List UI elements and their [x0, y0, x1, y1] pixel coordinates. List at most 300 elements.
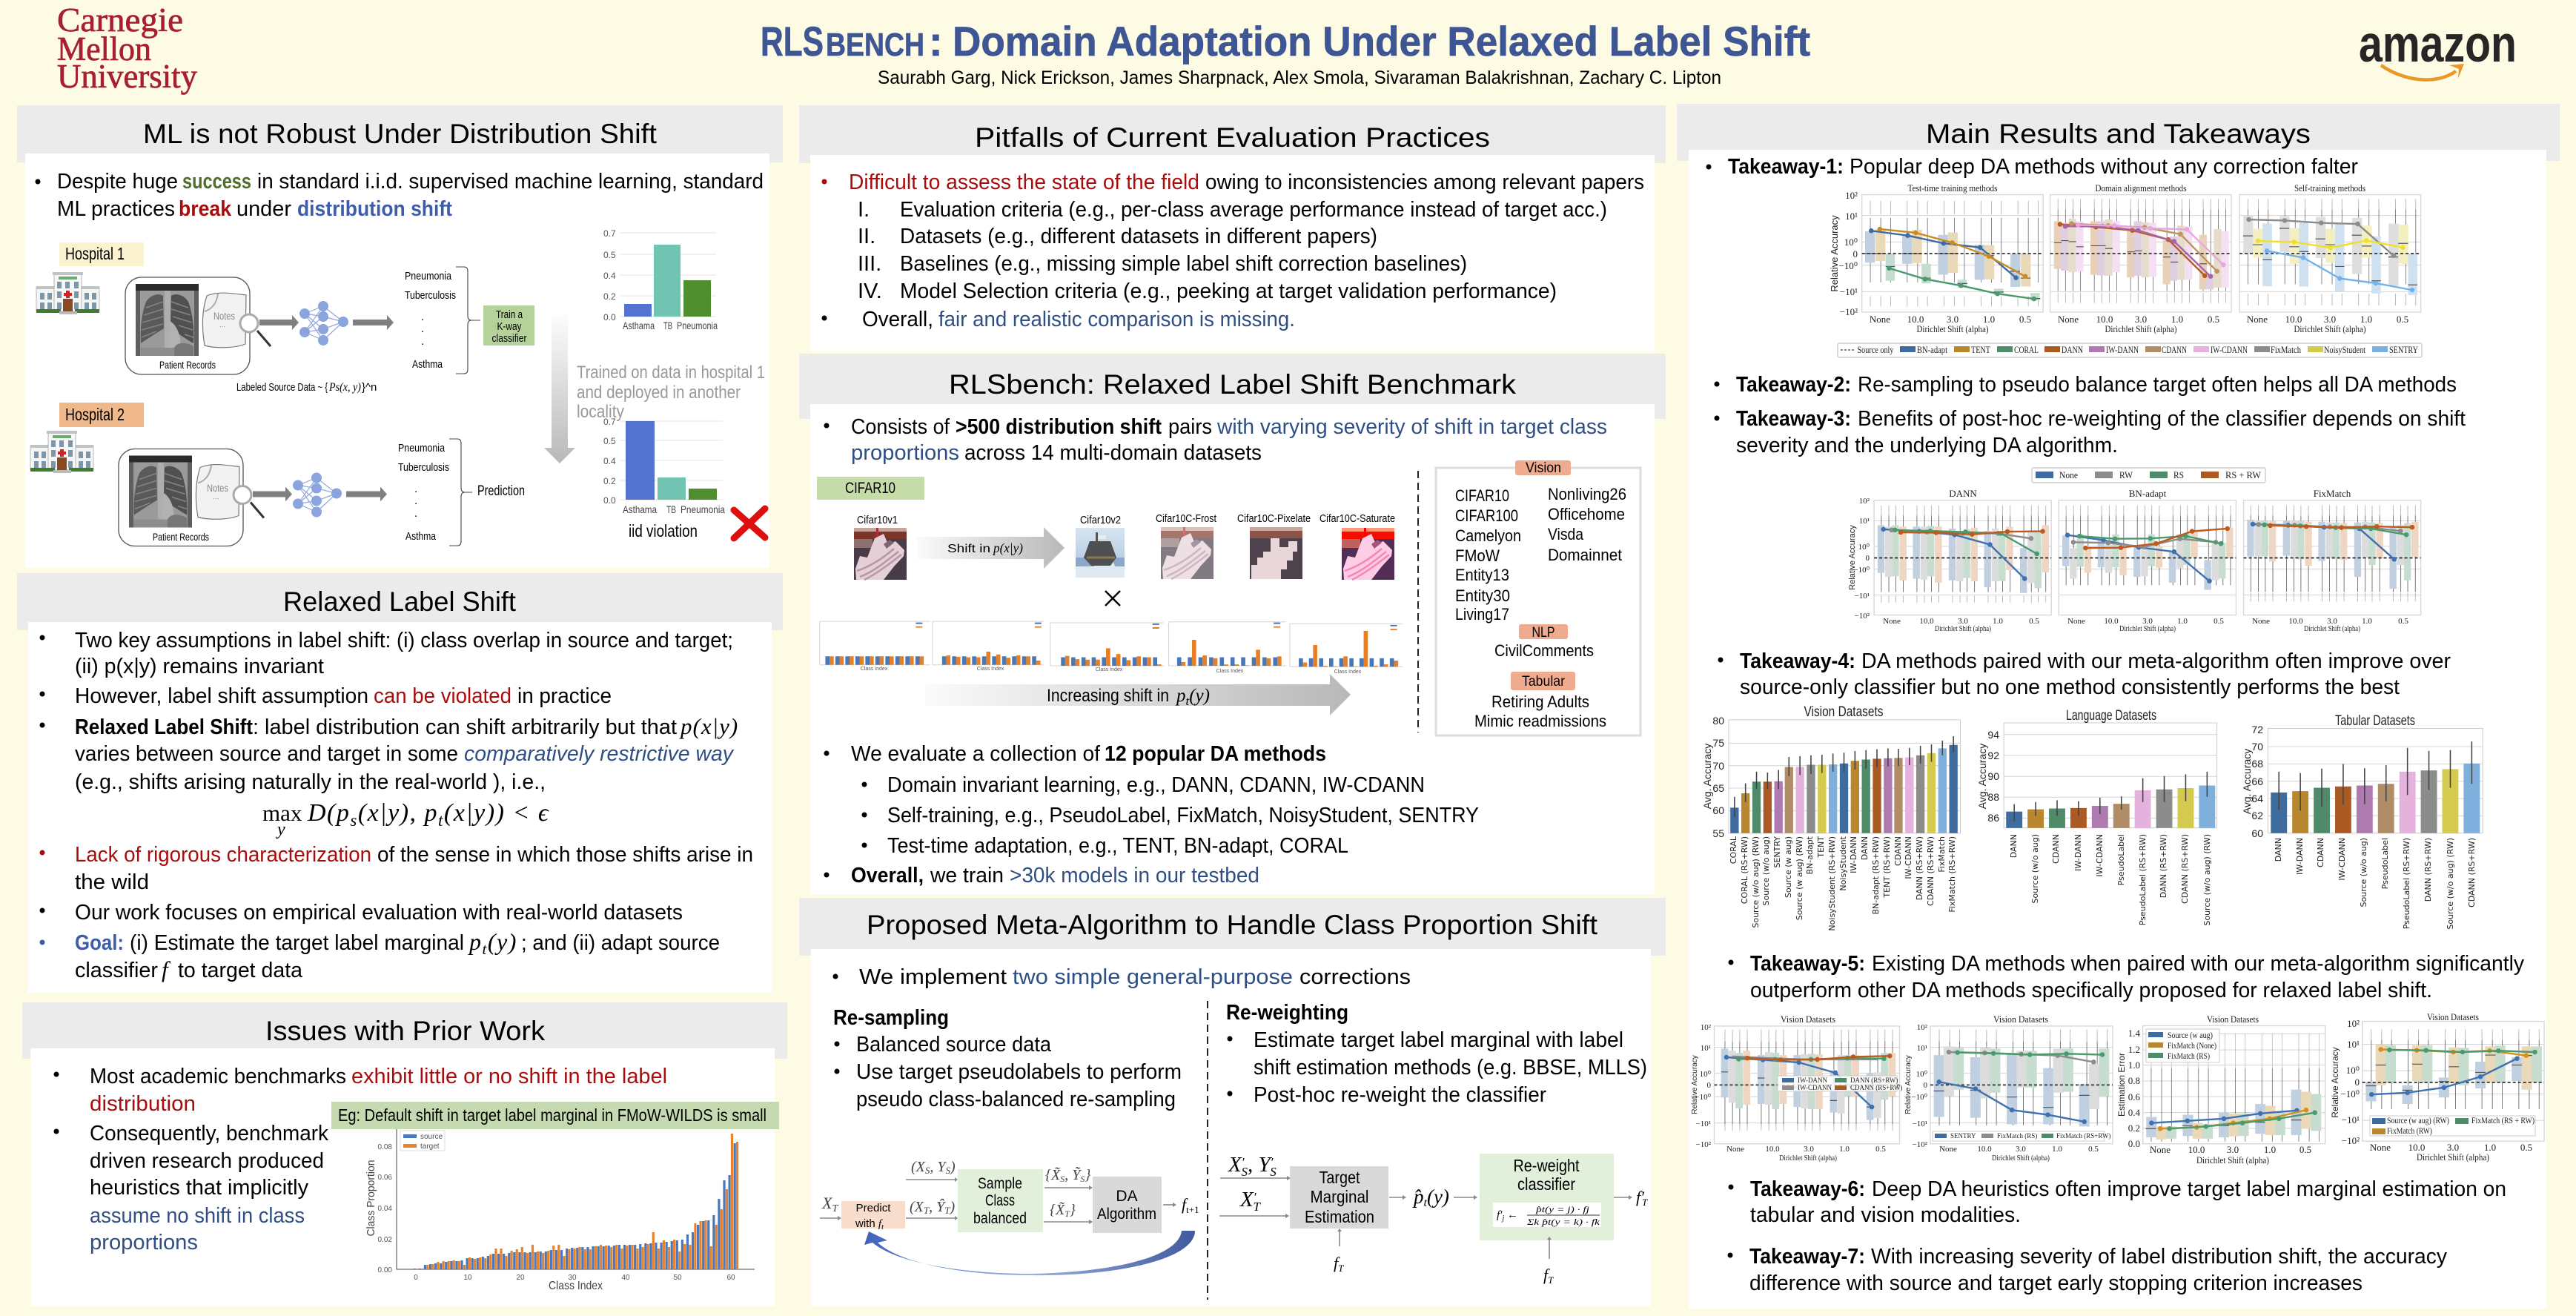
- icon: red cross: [734, 509, 765, 538]
- hospital 2 label: Hospital 2: [65, 405, 125, 424]
- box plots: relative accuracy by DA method family: None: [2247, 314, 2268, 325]
- mini bar charts: class proportions with increasing shift: [820, 621, 1403, 675]
- box plots: DANN, BN-adapt, FixMatch with corrections: 10⁰: [1858, 543, 1870, 552]
- chart titles and ticks: 0.8: [2128, 1075, 2140, 1086]
- source and pseudolabel inputs: [906, 1159, 958, 1220]
- box plots: relative accuracy by DA method family: 1.0: [2171, 314, 2183, 325]
- re-weight classifier box: ←: [1504, 1209, 1518, 1221]
- mini bar charts: class proportions with increasing shift: Class Index: [1334, 669, 1362, 675]
- sample class balanced box: Class: [985, 1192, 1015, 1209]
- flow diagram: re-sampling: [820, 1159, 1199, 1275]
- mini bar charts: class proportions with increasing shift: Class Index: [1216, 669, 1244, 674]
- box plots: DANN, BN-adapt, FixMatch with corrections: 1.0: [2362, 617, 2372, 626]
- output classes 2: Pneumonia: [398, 442, 446, 454]
- assumptions text: (x|y)) < ϵ: [444, 799, 549, 827]
- output classes 2: [398, 439, 525, 546]
- sample class balanced box: balanced: [973, 1210, 1027, 1227]
- box plots: relative accuracy by DA method family: Domain alignment methods: [2095, 182, 2187, 194]
- predict box: with f: [855, 1217, 881, 1230]
- chart titles and ticks: 0: [1923, 1081, 1927, 1090]
- assumptions text: Our work focuses on empirical evaluation with real-world datasets: [75, 901, 683, 925]
- chart titles and ticks: 0.2: [2128, 1122, 2140, 1134]
- model input to estimation: f: [1334, 1254, 1338, 1272]
- legends inside comparison charts: FixMatch (RS+RW): [2056, 1132, 2110, 1140]
- legend: DA methods: DANN: [2062, 344, 2083, 355]
- bar chart: vision datasets: Vision Datasets: [1804, 704, 1883, 720]
- arrow: hospital 1 to hospital 2: [544, 314, 575, 463]
- bar chart: vision datasets: Source (w/o aug) (RW): [1751, 836, 1761, 928]
- pitfalls list: [821, 171, 1644, 331]
- input XT: T: [832, 1203, 838, 1214]
- estimated marginal: t: [1423, 1197, 1428, 1209]
- re-weighting text: Post-hoc re-weight the classifier: [1254, 1083, 1546, 1107]
- bar chart: vision datasets: Source (w/o aug): [1761, 836, 1771, 905]
- inputs: [1219, 1153, 1291, 1218]
- bar chart: language datasets: IW-DANN: [2073, 834, 2083, 871]
- legend: DA methods: IW-DANN: [2106, 344, 2139, 355]
- chart titles and ticks: 10¹: [2347, 1039, 2360, 1050]
- vision datasets: CIFAR10: [1455, 486, 1509, 505]
- chart titles and ticks: 10⁰: [1700, 1070, 1712, 1079]
- model input to re-weighting: [1543, 1237, 1554, 1286]
- bar chart: FMoW class proportions: 0.00: [378, 1266, 392, 1274]
- issues text: Most academic benchmarks: [90, 1065, 346, 1088]
- bar chart: vision datasets: Source (w aug): [1784, 836, 1793, 898]
- bar chart: language datasets: DANN: [2009, 834, 2019, 858]
- bar chart: FMoW class proportions: 30: [568, 1274, 577, 1282]
- chart titles and ticks: −10²: [1912, 1140, 1928, 1149]
- chart titles and ticks: Estimation Error: [2116, 1053, 2127, 1117]
- bar chart: hospital 1 class proportions: 0.2: [603, 291, 616, 302]
- bar chart: vision datasets: CORAL: [1729, 836, 1738, 864]
- legend: correction strategies: [2032, 468, 2265, 483]
- output classes 2: .: [414, 507, 417, 520]
- box plots: relative accuracy by DA method family: −10¹: [1840, 286, 1858, 297]
- bar chart: FMoW class proportions: 0: [414, 1274, 418, 1282]
- image: Cifar10v2: Cifar10v2: [1080, 514, 1121, 526]
- assumptions text: Relaxed Label Shift: [75, 715, 253, 739]
- chart titles and ticks: Vision Datasets: [1781, 1014, 1835, 1025]
- bar chart: tabular datasets: DANN (RS+RW): [2423, 838, 2433, 902]
- bar chart: language datasets: Language Datasets: [2066, 708, 2156, 724]
- box plots: DANN, BN-adapt, FixMatch with corrections: BN-adapt: [2129, 488, 2167, 499]
- panel: Proposed Meta-Algorithm: [799, 898, 1666, 1306]
- output classes 2: Asthma: [405, 530, 437, 543]
- icon: hospital 2: [30, 431, 93, 473]
- chart titles and ticks: 1.0: [2052, 1145, 2062, 1154]
- assumptions text: of the sense in which those shifts arise in: [377, 843, 753, 867]
- pitfalls list: Difficult to assess the state of the field: [849, 171, 1199, 194]
- pipeline: hospital 1 records to network: Patient Records: [159, 359, 216, 371]
- resampled data: S: [1060, 1174, 1064, 1184]
- vision datasets: Entity30: [1455, 586, 1510, 605]
- bar chart: hospital 2 class proportions: Asthama: [623, 503, 657, 515]
- box plots: relative accuracy by DA method family: −10²: [1840, 306, 1858, 317]
- chart titles and ticks: Dirichlet Shift (alpha): [2196, 1154, 2269, 1165]
- box plots: DANN, BN-adapt, FixMatch with corrections: 1.0: [1993, 617, 2003, 626]
- tabular tag: [1511, 672, 1575, 690]
- bar chart: vision datasets: 60: [1712, 804, 1724, 816]
- chart titles and ticks: 0.5: [2088, 1145, 2099, 1154]
- bar chart: vision datasets: FixMatch (RS+RW): [1947, 836, 1957, 913]
- deployment note: Trained on data in hospital 1: [577, 363, 765, 383]
- benchmark summary text: pairs: [1168, 415, 1212, 439]
- box plots: relative accuracy by DA method family: −10⁰: [1838, 260, 1858, 271]
- chart titles and ticks: Vision Datasets: [1993, 1014, 2048, 1025]
- predict box: t: [881, 1223, 884, 1231]
- legend: DA methods: BN-adapt: [1917, 344, 1947, 355]
- bar chart: language datasets: Avg. Accuracy: [1976, 744, 1988, 809]
- assumptions text: p(x|y): [679, 713, 738, 739]
- assumptions text: f: [162, 956, 171, 982]
- bar chart: hospital 1 class proportions: 0.0: [603, 312, 616, 323]
- box plots: relative accuracy by DA method family: 0.5: [2019, 314, 2031, 325]
- legends inside comparison charts: Source (w aug) (RW): [2387, 1115, 2449, 1125]
- box plots: relative accuracy by DA method family: Test-time training methods: [1908, 182, 1997, 194]
- bar chart: language datasets: Source (w/o aug) (RW): [2202, 834, 2212, 926]
- re-sampling text: Balanced source data: [856, 1033, 1052, 1057]
- legend: DA methods: NoisyStudent: [2324, 344, 2365, 355]
- box plots: DANN, BN-adapt, FixMatch with corrections: −10²: [1854, 612, 1870, 621]
- output classes 2: Prediction: [477, 483, 525, 499]
- box plots: relative accuracy by DA method family: 10¹: [1845, 211, 1858, 222]
- assumptions text: (y): [488, 928, 517, 955]
- box plots: DANN, BN-adapt, FixMatch with corrections: None: [2067, 617, 2085, 626]
- chart titles and ticks: None: [1726, 1145, 1744, 1154]
- bar chart: hospital 1 class proportions: Asthama: [623, 320, 655, 331]
- box plots: DANN, BN-adapt, FixMatch with corrections: 0.5: [2029, 617, 2039, 626]
- assumptions text: classifier: [75, 959, 158, 982]
- model input to estimation: [1334, 1229, 1344, 1274]
- box plots: relative accuracy by DA method family: 0: [1853, 248, 1858, 259]
- bar chart: tabular datasets: Avg. Accuracy: [2241, 749, 2253, 814]
- box plots: DANN, BN-adapt, FixMatch with corrections: −10¹: [1854, 592, 1870, 601]
- bar chart: tabular datasets: 66: [2251, 776, 2263, 787]
- intro text: break: [179, 197, 232, 221]
- vision tag: [1515, 460, 1571, 476]
- resampled data: {X̃: [1045, 1167, 1060, 1183]
- output classes 2: .: [414, 483, 417, 495]
- legends inside comparison charts: CDANN (RS+RW): [1850, 1084, 1902, 1091]
- bar chart: language datasets: 92: [1987, 750, 1999, 761]
- bar chart: FMoW class proportions: 0.08: [378, 1143, 392, 1151]
- takeaway 5: Existing DA methods when paired with our meta-algorithm significantly: [1872, 952, 2524, 976]
- assumptions text: y: [276, 820, 285, 839]
- arrow: shift in p(x|y): [917, 527, 1064, 569]
- assumptions text: (i) Estimate the target label marginal: [130, 931, 464, 955]
- source and pseudolabel inputs: T: [924, 1205, 930, 1216]
- box plots: DANN, BN-adapt, FixMatch with corrections: 0.5: [2398, 617, 2408, 626]
- assumptions text: to target data: [178, 959, 303, 982]
- deployment note: locality: [577, 402, 624, 422]
- bar chart: language datasets: 94: [1987, 729, 1999, 741]
- arrow: increasing shift in pt(y): (y): [1189, 686, 1210, 706]
- output classes 2: .: [414, 495, 417, 507]
- output classes 1: Pneumonia: [405, 270, 452, 282]
- pitfalls list: Evaluation criteria (e.g., per-class average performance instead of target acc.): [900, 198, 1607, 222]
- box plots: DANN, BN-adapt, FixMatch with corrections: 3.0: [2327, 617, 2337, 626]
- takeaways 2 and 3: Takeaway-2:: [1736, 373, 1851, 397]
- deployment note: and deployed in another: [577, 383, 741, 403]
- chart titles and ticks: 0.5: [2299, 1144, 2311, 1155]
- legends inside comparison charts: [1778, 1029, 2535, 1141]
- assumptions text: t: [482, 940, 488, 958]
- legend: correction strategies: None: [2059, 469, 2078, 480]
- title: RLS: [761, 18, 824, 65]
- intro text: We implement: [859, 965, 1007, 989]
- flow diagram: re-weighting: [1219, 1153, 1648, 1286]
- DA algorithm box: Algorithm: [1097, 1206, 1156, 1223]
- tabular datasets: Retiring Adults: [1491, 692, 1589, 711]
- bar chart: tabular datasets: DANN: [2274, 838, 2283, 862]
- box plots: DANN, BN-adapt, FixMatch with corrections: 0.5: [2214, 617, 2224, 626]
- bar chart: tabular datasets: Tabular Datasets: [2335, 713, 2415, 729]
- train classifier box: Train a: [496, 308, 523, 321]
- output f'T: f′: [1636, 1188, 1644, 1206]
- box plots: relative accuracy by DA method family: 0.5: [2397, 314, 2408, 325]
- bar chart: hospital 2 class proportions: TB: [666, 503, 676, 515]
- DA algorithm box: [1093, 1177, 1162, 1233]
- bar chart: language datasets: PseudoLabel (RS+RW): [2138, 834, 2148, 925]
- box plots: relative accuracy by DA method family: [1829, 182, 2421, 334]
- issues text: assume no shift in class: [90, 1204, 305, 1228]
- pitfalls list: Baselines (e.g., missing simple label shift correction baselines): [900, 252, 1467, 276]
- labeled source data caption: Labeled Source Data ~ {: [236, 381, 328, 394]
- box plots: DANN, BN-adapt, FixMatch with corrections: 10.0: [2288, 617, 2303, 626]
- benchmark summary text: >500 distribution shift: [956, 415, 1162, 439]
- title: :: [929, 18, 943, 65]
- model input to re-weighting: T: [1548, 1274, 1554, 1286]
- pitfalls list: fair and realistic comparison is missing.: [938, 308, 1295, 331]
- bar chart: FMoW class proportions: 0.06: [378, 1174, 392, 1182]
- box plots: relative accuracy by DA method family: Relative Accuracy: [1829, 215, 1840, 292]
- re-weighting text: Re-weighting: [1226, 1001, 1348, 1025]
- assumptions text: D(p: [308, 799, 350, 827]
- estimated marginal: [1389, 1186, 1477, 1209]
- vision datasets: Nonliving26: [1548, 485, 1626, 503]
- output ft+1: f: [1182, 1195, 1186, 1214]
- vision tag: Vision: [1526, 460, 1561, 476]
- bar chart: FMoW class proportions: [365, 1129, 755, 1292]
- hospital 1 label: Hospital 1: [65, 244, 125, 263]
- chart titles and ticks: 10¹: [1917, 1044, 1927, 1053]
- assumptions text: p: [469, 928, 482, 955]
- bar chart: vision datasets: FixMatch: [1937, 836, 1947, 873]
- image: Cifar10C pixelate: Cifar10C-Pixelate: [1237, 512, 1311, 525]
- bar chart: tabular datasets: IW-CDANN: [2337, 838, 2347, 881]
- vision datasets: Living17: [1455, 605, 1509, 624]
- bar chart: tabular datasets: 70: [2251, 741, 2263, 753]
- legends inside comparison charts: FixMatch (RS): [1997, 1132, 2037, 1140]
- methods text: 12 popular DA methods: [1105, 742, 1326, 766]
- box plots: DANN, BN-adapt, FixMatch with corrections: −10⁰: [1853, 566, 1870, 575]
- assumptions text: s: [350, 811, 358, 830]
- bar chart: hospital 1 class proportions: 0.7: [603, 228, 616, 239]
- chart titles and ticks: −10⁰: [1695, 1093, 1712, 1102]
- legend: correction strategies: RS + RW: [2225, 469, 2262, 480]
- takeaways 2 and 3: Takeaway-3:: [1736, 407, 1851, 431]
- labeled source data caption: }^n: [362, 381, 377, 394]
- chart titles and ticks: None: [2370, 1142, 2391, 1153]
- bar chart: FMoW class proportions: 0.04: [378, 1205, 392, 1213]
- chart titles and ticks: 10.0: [1977, 1145, 1992, 1154]
- tabular datasets: [1474, 692, 1606, 730]
- pipeline: hospital 2 records to network: Notes: [207, 482, 228, 494]
- takeaway 5: Takeaway-5:: [1750, 952, 1865, 976]
- deployment note: [577, 363, 765, 422]
- bar chart: vision datasets: IW-DANN: [1849, 836, 1858, 873]
- bar chart: tabular datasets: 68: [2251, 758, 2263, 770]
- chart titles and ticks: 3.0: [1804, 1145, 1814, 1154]
- image: Cifar10C saturate: Cifar10C-Saturate: [1320, 512, 1395, 525]
- bar chart: FMoW class proportions: Class Proportion: [365, 1160, 377, 1237]
- model input to estimation: T: [1338, 1263, 1344, 1274]
- output f'T: T: [1642, 1197, 1648, 1208]
- pipeline: hospital 2 records to network: [119, 449, 387, 546]
- box plots: DANN, BN-adapt, FixMatch with corrections: Relative Accuracy: [1848, 525, 1857, 590]
- takeaway 1: Popular deep DA methods without any correction falter: [1850, 155, 2358, 179]
- box plots: relative accuracy by DA method family: 1.0: [1983, 314, 1995, 325]
- source and pseudolabel inputs: , Ŷ: [929, 1198, 946, 1215]
- bar chart: language datasets: CDANN: [2051, 834, 2061, 864]
- box plots: DANN, BN-adapt, FixMatch with corrections: [1848, 488, 2421, 633]
- heading: Proposed Meta-Algorithm to Handle Class Proportion Shift: [867, 910, 1598, 940]
- takeaway 6: tabular and vision modalities.: [1750, 1203, 2021, 1227]
- output classes 1: .: [421, 335, 424, 348]
- chart titles and ticks: 1.0: [2264, 1144, 2276, 1155]
- predict box: Predict: [855, 1202, 891, 1214]
- bar chart: vision datasets: DANN: [1860, 836, 1870, 860]
- DA algorithm box: DA: [1116, 1188, 1138, 1205]
- chart titles and ticks: 0.4: [2128, 1107, 2141, 1118]
- logo: Carnegie Mellon University: Mellon: [57, 30, 151, 67]
- vision datasets: Camelyon: [1455, 526, 1521, 545]
- bar chart: vision datasets: BN-adapt: [1805, 836, 1815, 875]
- chart titles and ticks: 10.0: [1765, 1145, 1780, 1154]
- box plots: relative accuracy by DA method family: 10.0: [2096, 314, 2113, 325]
- output f'T: [1614, 1188, 1648, 1208]
- panel: Issues with Prior Work: [22, 1002, 787, 1306]
- bar chart: vision datasets: [1701, 704, 1961, 931]
- chart titles and ticks: None: [2150, 1144, 2171, 1155]
- box plots: relative accuracy by DA method family: Dirichlet Shift (alpha): [2105, 323, 2176, 334]
- source and pseudolabel inputs: , Y: [930, 1159, 947, 1175]
- mini bar charts: class proportions with increasing shift: Class Index: [977, 667, 1004, 672]
- vision datasets: [1455, 485, 1626, 624]
- pitfalls list: II.: [858, 225, 875, 248]
- box plots: relative accuracy by DA method family: 10.0: [2285, 314, 2302, 325]
- box plots: DANN, BN-adapt, FixMatch with corrections: 3.0: [1958, 617, 1968, 626]
- legend: DA methods: SENTRY: [2389, 344, 2418, 355]
- bar chart: tabular datasets: 62: [2251, 810, 2263, 821]
- panel: RLSbench benchmark: [799, 354, 1666, 895]
- re-weight classifier box: f′: [1497, 1209, 1502, 1221]
- output classes 1: Asthma: [412, 358, 443, 371]
- assumptions text: : label distribution can shift arbitrarily but that: [253, 715, 677, 739]
- bar chart: vision datasets: TENT (RS+RW): [1882, 836, 1892, 899]
- inputs: X: [1228, 1153, 1242, 1177]
- chart titles and ticks: None: [1939, 1145, 1957, 1154]
- train classifier box: [483, 305, 534, 345]
- bar chart: vision datasets: NoisyStudent (RS+RW): [1827, 836, 1837, 931]
- heading: ML is not Robust Under Distribution Shift: [143, 119, 658, 149]
- legend: DA methods: [1838, 343, 2422, 357]
- chart titles and ticks: 1.0: [2128, 1059, 2140, 1071]
- takeaways 2 and 3: Benefits of post-hoc re-weighting of the classifier depends on shift: [1858, 407, 2466, 431]
- chart titles and ticks: 1.2: [2128, 1044, 2140, 1055]
- bar chart: vision datasets: CDANN: [1893, 836, 1903, 866]
- intro text: under: [236, 197, 291, 221]
- legend: DA methods: CORAL: [2014, 344, 2039, 355]
- box plots: relative accuracy by DA method family: 3.0: [2324, 314, 2336, 325]
- bar chart: vision datasets: SENTRY: [1772, 836, 1782, 868]
- benchmark summary text: proportions: [851, 441, 959, 465]
- chart titles and ticks: 3.0: [2227, 1144, 2239, 1155]
- bar chart: tabular datasets: 72: [2251, 724, 2263, 735]
- bar chart: tabular datasets: 60: [2251, 827, 2263, 839]
- tabular datasets: Mimic readmissions: [1474, 712, 1606, 730]
- source and pseudolabel inputs: S: [925, 1165, 930, 1176]
- image: Cifar10C pixelate: [1237, 512, 1311, 579]
- predict box: [841, 1201, 905, 1231]
- icon: hospital 1: [36, 272, 99, 314]
- re-sampling text: pseudo class-balanced re-sampling: [856, 1088, 1176, 1111]
- bar chart: language datasets: IW-CDANN: [2095, 834, 2105, 877]
- bar chart: hospital 2 class proportions: 0.4: [603, 456, 616, 466]
- pipeline: hospital 2 records to network: Patient Records: [153, 531, 209, 543]
- bar chart: vision datasets: Avg. Accuracy: [1701, 744, 1713, 809]
- box plots: relative accuracy by DA method family: 0.5: [2208, 314, 2219, 325]
- chart titles and ticks: 10¹: [1701, 1044, 1711, 1053]
- logo: Carnegie Mellon University: University: [57, 58, 197, 95]
- takeaway 5: [1729, 952, 2524, 1002]
- re-weight classifier box: p̂t(y = j) · fj: [1535, 1204, 1590, 1214]
- legend: DA methods: CDANN: [2162, 344, 2187, 355]
- chart titles and ticks: 1.0: [1839, 1145, 1850, 1154]
- bar chart: FMoW class proportions: 0.02: [378, 1236, 392, 1244]
- takeaway 4: [1718, 649, 2451, 699]
- icon: cross product sign: [1105, 591, 1120, 606]
- chart titles and ticks: Vision Datasets: [2427, 1011, 2479, 1022]
- takeaway 7: difference with source and target early stopping criterion increases: [1749, 1272, 2363, 1295]
- inputs: S: [1241, 1165, 1248, 1179]
- bar chart: hospital 1 class proportions: [603, 228, 718, 331]
- re-weight classifier box: classifier: [1517, 1174, 1575, 1194]
- logo: Carnegie Mellon University: Carnegie: [57, 1, 183, 39]
- resampled data: {X̃: [1050, 1202, 1064, 1218]
- train classifier box: K-way: [497, 320, 522, 333]
- chart titles and ticks: 10.0: [2188, 1144, 2205, 1155]
- bar chart: vision datasets: NoisyStudent: [1838, 836, 1848, 891]
- inputs: X: [1240, 1188, 1254, 1211]
- heading: Main Results and Takeaways: [1926, 119, 2311, 149]
- bar chart: vision datasets: 80: [1712, 715, 1724, 727]
- output classes 1: Tuberculosis: [405, 289, 456, 302]
- box plots: relative accuracy by DA method family: 3.0: [1947, 314, 1959, 325]
- bar chart: tabular datasets: PseudoLabel (RS+RW): [2402, 838, 2411, 929]
- bar chart: FMoW class proportions: 60: [726, 1274, 735, 1282]
- methods text: Domain invariant learning, e.g., DANN, CDANN, IW-CDANN: [887, 773, 1425, 797]
- box plots: relative accuracy by DA method family: Dirichlet Shift (alpha): [1917, 323, 1988, 334]
- issues text: exhibit little or no shift in the label: [351, 1065, 667, 1088]
- image: Cifar10v1: [854, 514, 907, 580]
- box plots: DANN, BN-adapt, FixMatch with corrections: 1.0: [2177, 617, 2188, 626]
- re-weight classifier box: Σk p̂t(y = k) · fk: [1526, 1217, 1600, 1227]
- intro text: corrections: [1299, 965, 1411, 989]
- pitfalls list: I.: [858, 198, 870, 222]
- heading: Relaxed Label Shift: [283, 586, 517, 617]
- logo: Carnegie Mellon University: [57, 1, 197, 95]
